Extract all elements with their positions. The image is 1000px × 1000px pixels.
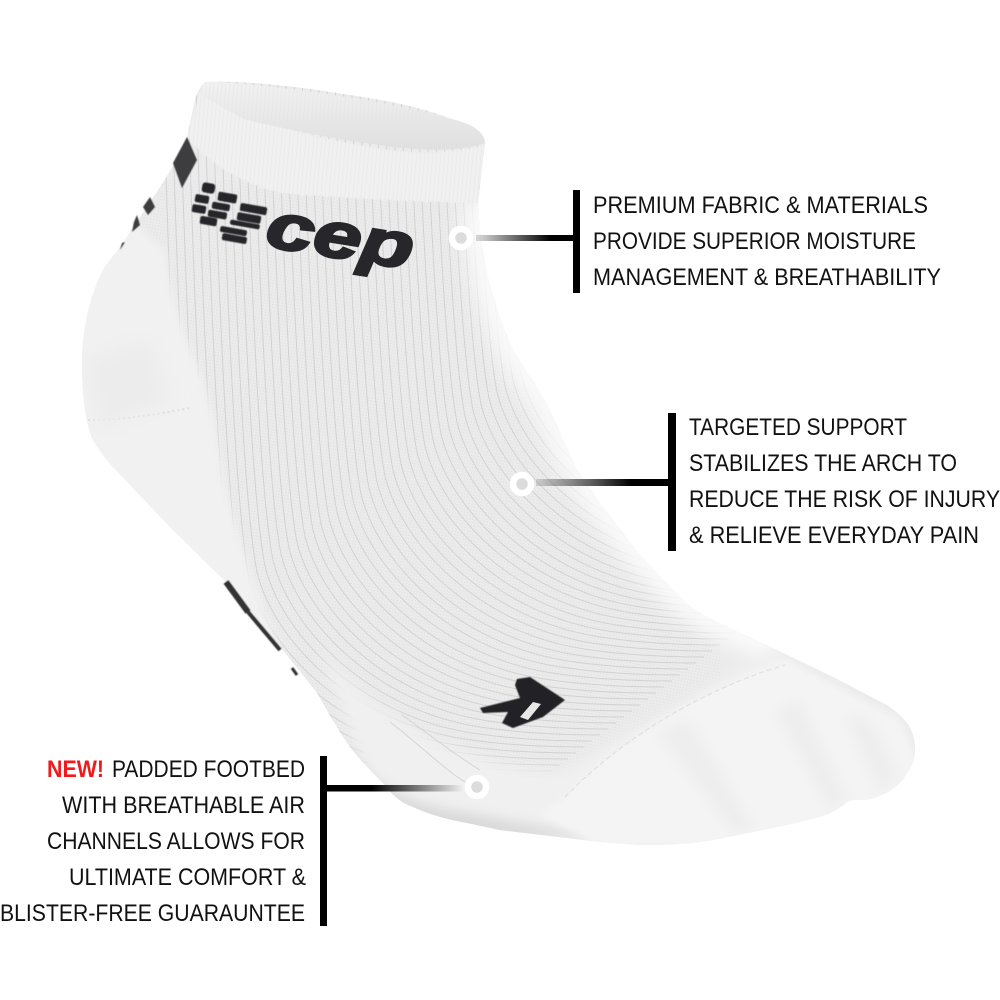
callout text: PADDED FOOTBED: [112, 756, 305, 783]
connector line: [327, 785, 465, 792]
sock body: [82, 82, 915, 845]
callout text: WITH BREATHABLE AIR: [62, 792, 305, 819]
vertical bar: [573, 190, 580, 293]
heel panel: [82, 228, 280, 642]
callout text: [0, 756, 306, 927]
cuff band ribs: [187, 92, 484, 203]
callout text: TARGETED SUPPORT: [689, 414, 907, 441]
sole pattern marks: [226, 582, 297, 675]
toe cap: [910, 762, 913, 767]
callout text: CHANNELS ALLOWS FOR: [47, 828, 305, 855]
callout text: PROVIDE SUPERIOR MOISTURE: [593, 228, 916, 255]
knit texture: [140, 180, 720, 768]
sock photo illustration: [82, 82, 915, 845]
connector dot: [513, 475, 531, 493]
cep logo wordmark: cep: [262, 189, 419, 283]
vertical bar: [668, 413, 676, 551]
heel shade: [108, 418, 120, 420]
callout: premium fabric: [452, 190, 941, 293]
side logo fragments: [120, 197, 155, 250]
diamond mark: [173, 137, 197, 188]
callout text: STABILIZES THE ARCH TO: [689, 450, 957, 477]
toe logo mark: [480, 677, 565, 728]
callout: targeted support: [513, 413, 1000, 551]
vertical bar: [320, 756, 327, 926]
cuff opening ribs: [200, 82, 485, 149]
callout text: PREMIUM FABRIC & MATERIALS: [593, 192, 928, 219]
callout text: MANAGEMENT & BREATHABILITY: [593, 264, 941, 291]
callout: padded footbed: [0, 756, 486, 927]
callout text: ULTIMATE COMFORT &: [69, 864, 306, 891]
footbed lines: [390, 715, 480, 782]
callout text: BLISTER-FREE GUARAUNTEE: [0, 900, 305, 927]
cuff opening: [200, 82, 485, 149]
callout text: [689, 414, 1000, 549]
footbed band: [325, 662, 718, 839]
cep logo stripes: [191, 182, 267, 244]
cuff band: [187, 92, 484, 203]
toe logo window: [520, 702, 541, 720]
connector line: [536, 479, 668, 486]
toe seam: [565, 665, 785, 797]
toe fold shadows: [655, 700, 900, 835]
callout text: NEW!: [47, 756, 104, 783]
instep ribs: [166, 82, 728, 772]
callout text: [593, 192, 941, 291]
connector line: [476, 235, 575, 241]
connector dot: [468, 778, 486, 796]
instep edge glow: [478, 200, 777, 650]
heel stitch line: [88, 408, 190, 420]
connector dot: [452, 229, 470, 247]
bottom shadow: [382, 781, 572, 838]
